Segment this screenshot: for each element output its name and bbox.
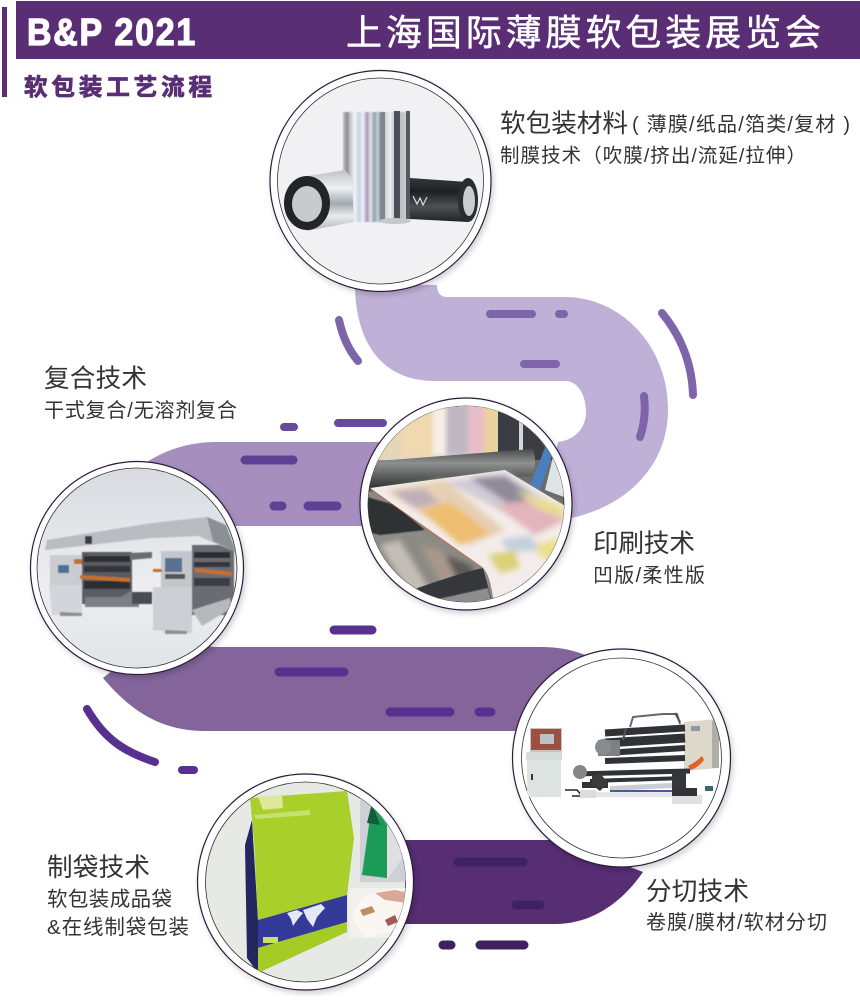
label: lamination xyxy=(44,364,237,422)
photo circle: slitting machine xyxy=(512,649,730,867)
photo circle: film rolls xyxy=(270,70,491,292)
label: lamination: 干式复合/无溶剂复合 xyxy=(44,399,237,422)
ribbon: film to printing xyxy=(355,285,668,525)
decorative dashes xyxy=(87,313,693,945)
label: slitting: 卷膜/膜材/软材分切 xyxy=(646,911,827,934)
event brand: B&P 2021 xyxy=(27,12,197,54)
event title: 上海国际薄膜软包装展览会 xyxy=(346,12,821,53)
label: bag making: 软包装成品袋 xyxy=(47,888,172,911)
photo circle: gravure printing press xyxy=(360,398,580,622)
label: materials xyxy=(500,109,850,167)
photo circle: packaging bags xyxy=(198,774,414,990)
label: slitting: 分切技术 xyxy=(646,877,749,906)
label: printing: 凹版/柔性版 xyxy=(593,564,705,587)
left accent strip xyxy=(2,7,7,97)
label: lamination: 复合技术 xyxy=(44,364,147,393)
label: bag making: 制袋技术 xyxy=(47,853,150,882)
label: printing xyxy=(593,529,705,587)
ribbon: slitting to bag making xyxy=(390,840,643,924)
header bar xyxy=(16,1,860,59)
label: materials: ( 薄膜/纸品/箔类/复材 ) xyxy=(632,113,850,136)
ribbon: printing to lamination xyxy=(147,442,400,526)
section heading: 软包装工艺流程 xyxy=(24,74,212,100)
label: bag making: &在线制袋包装 xyxy=(47,916,189,939)
label: bag making xyxy=(47,853,189,939)
label: slitting xyxy=(646,877,827,934)
label: printing: 印刷技术 xyxy=(593,529,695,558)
photo circle: lamination machine xyxy=(30,462,244,674)
ribbon: lamination to slitting xyxy=(103,640,600,731)
label: materials: 软包装材料 xyxy=(500,109,628,138)
label: materials: 制膜技术（吹膜/挤出/流延/拉伸） xyxy=(500,145,806,167)
